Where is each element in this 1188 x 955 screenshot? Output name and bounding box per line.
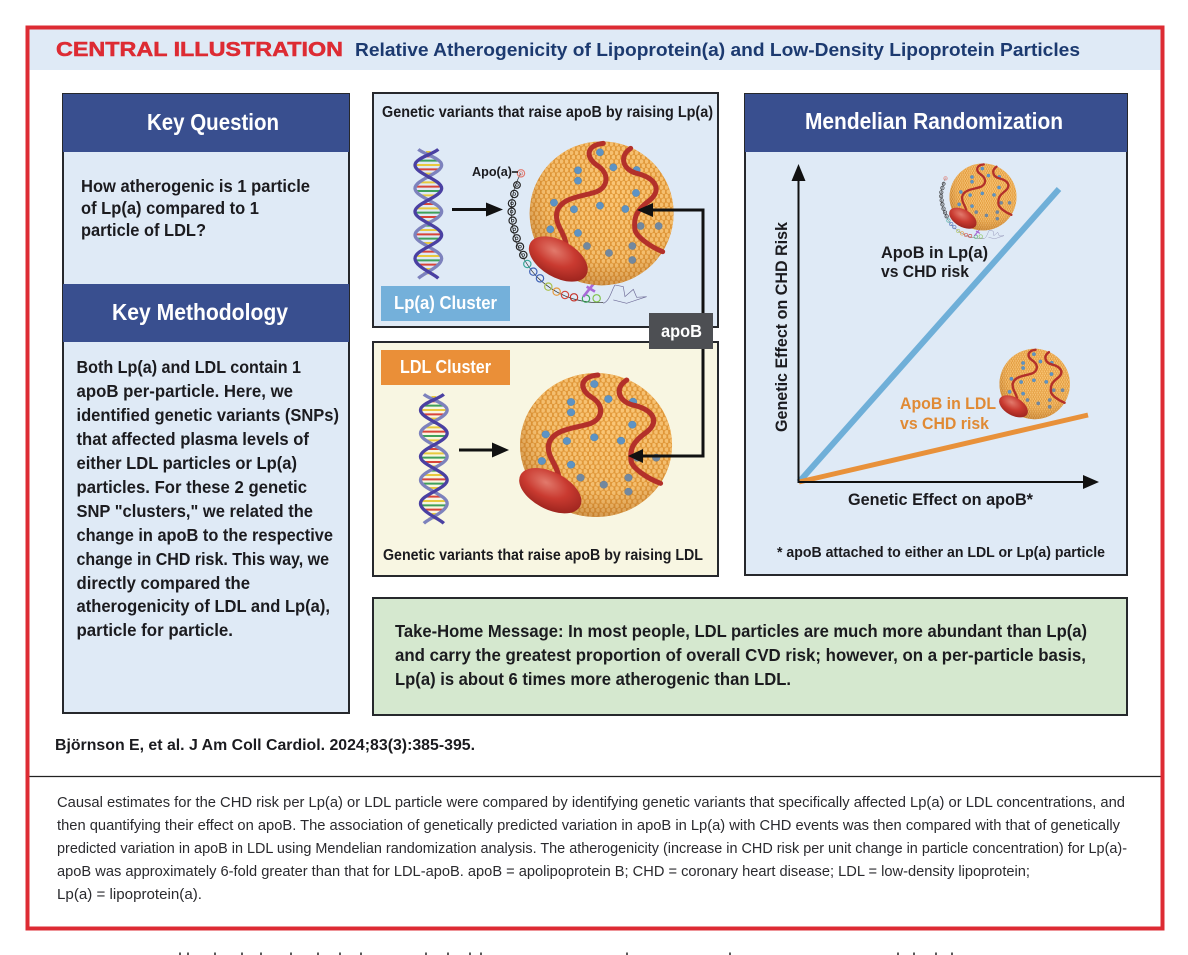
key methodology text: directly compared the [76,573,250,593]
key question text: particle of LDL? [81,220,206,240]
key methodology text: apoB per-particle. Here, we [76,381,293,401]
icon: LDL particle [511,373,672,523]
Apo(a) label: Apo(a) [472,165,512,179]
line: LDL slope [799,415,1088,482]
LDL panel caption: Genetic variants that raise apoB by raising LDL [383,547,703,564]
caption [57,795,1127,903]
key methodology text: SNP "clusters," we related the [76,501,313,521]
key question heading [63,94,349,152]
icon: DNA helix [415,149,442,278]
caption: Lp(a) = lipoprotein(a). [57,887,202,903]
key question heading: Key Question [147,109,279,135]
panel: key question and methodology [63,94,349,713]
panel: take-home message: and carry the greatest proportion of overall CVD risk; however, on a per-particle basis, [395,645,1086,665]
title band [28,28,1162,70]
y axis label: Genetic Effect on CHD Risk [772,221,791,432]
x axis [798,475,1099,489]
icon: small LDL particle [995,349,1070,422]
chart footnote: * apoB attached to either an LDL or Lp(a) particle [777,544,1105,561]
key question text: How atherogenic is 1 particle [81,176,310,196]
x axis label: Genetic Effect on apoB* [848,490,1033,509]
key question text [81,176,310,240]
panel: take-home message: Lp(a) is about 6 times more atherogenic than LDL. [395,669,791,689]
central illustration label: CENTRAL ILLUSTRATION [56,39,343,61]
key methodology text [76,357,339,640]
Mendelian randomization heading: Mendelian Randomization [805,108,1063,134]
panel: Lp(a) cluster [373,93,718,327]
icon: Lp(a) particle [508,141,674,303]
caption: Causal estimates for the CHD risk per Lp(a) or LDL particle were compared by identifying genetic variants that specifically affected Lp(a) or LDL concentrations, and [57,795,1125,811]
series label: LDL: vs CHD risk [900,414,990,433]
key methodology text: that affected plasma levels of [76,429,309,449]
key methodology text: change in apoB to the respective [76,525,333,545]
Lp(a) panel heading: Genetic variants that raise apoB by raising Lp(a) [382,104,713,121]
panel: LDL cluster [373,342,718,576]
Lp(a) cluster tag [381,286,510,321]
arrow: DNA to Lp(a) [452,202,503,216]
series label: Lp(a): ApoB in Lp(a) [881,243,988,262]
apoB label box [649,313,713,349]
arrow: apoB to Lp(a) particle [637,203,703,314]
LDL cluster tag [381,350,510,385]
chart [772,163,1099,509]
series label: Lp(a): vs CHD risk [881,262,969,281]
key methodology text: identified genetic variants (SNPs) [76,405,339,425]
Mendelian randomization heading [745,94,1127,152]
arrow: apoB to LDL particle [628,348,703,463]
caption: then quantifying their effect on apoB. The association of genetically predicted variation in apoB in Lp(a) with CHD events was then compared with that of genetically [57,818,1121,834]
series label: LDL: ApoB in LDL [900,394,996,413]
line: Lp(a) slope [799,189,1059,482]
caption: apoB was approximately 6-fold greater than that for LDL-apoB. apoB = apolipoprotein B; CHD = coronary heart disease; LDL = low-density lipoprotein; [57,864,1030,880]
key question text: of Lp(a) compared to 1 [81,198,259,218]
panel: take-home message [373,598,1127,715]
caption: predicted variation in apoB in LDL using Mendelian randomization analysis. The atherogenicity (increase in CHD risk per unit change in particle concentration) for Lp(a)- [57,841,1127,857]
panel: take-home message: Take-Home Message: In most people, LDL particles are much more abundant than Lp(a) [395,621,1087,641]
key methodology text: change in CHD risk. This way, we [76,549,329,569]
key methodology text: particle for particle. [76,620,233,640]
key methodology text: atherogenicity of LDL and Lp(a), [76,596,330,616]
Lp(a) cluster tag: Lp(a) Cluster [394,293,497,313]
key methodology heading [63,284,349,342]
citation: Björnson E, et al. J Am Coll Cardiol. 2024;83(3):385-395. [55,737,475,754]
icon: small Lp(a) particle [939,163,1017,239]
LDL cluster tag: LDL Cluster [400,357,491,377]
key methodology text: either LDL particles or Lp(a) [76,453,297,473]
y axis [792,164,806,483]
key methodology heading: Key Methodology [112,299,288,325]
title: Relative Atherogenicity of Lipoprotein(a) and Low-Density Lipoprotein Particles [355,39,1080,60]
apoB label box: apoB [661,321,702,341]
key methodology text: Both Lp(a) and LDL contain 1 [76,357,301,377]
panel: Mendelian randomization [745,94,1127,575]
key methodology text: particles. For these 2 genetic [76,477,307,497]
series label: Lp(a) [881,243,988,281]
icon: DNA helix [420,394,447,523]
arrow: DNA to LDL [459,442,509,458]
series label: LDL [900,394,996,433]
